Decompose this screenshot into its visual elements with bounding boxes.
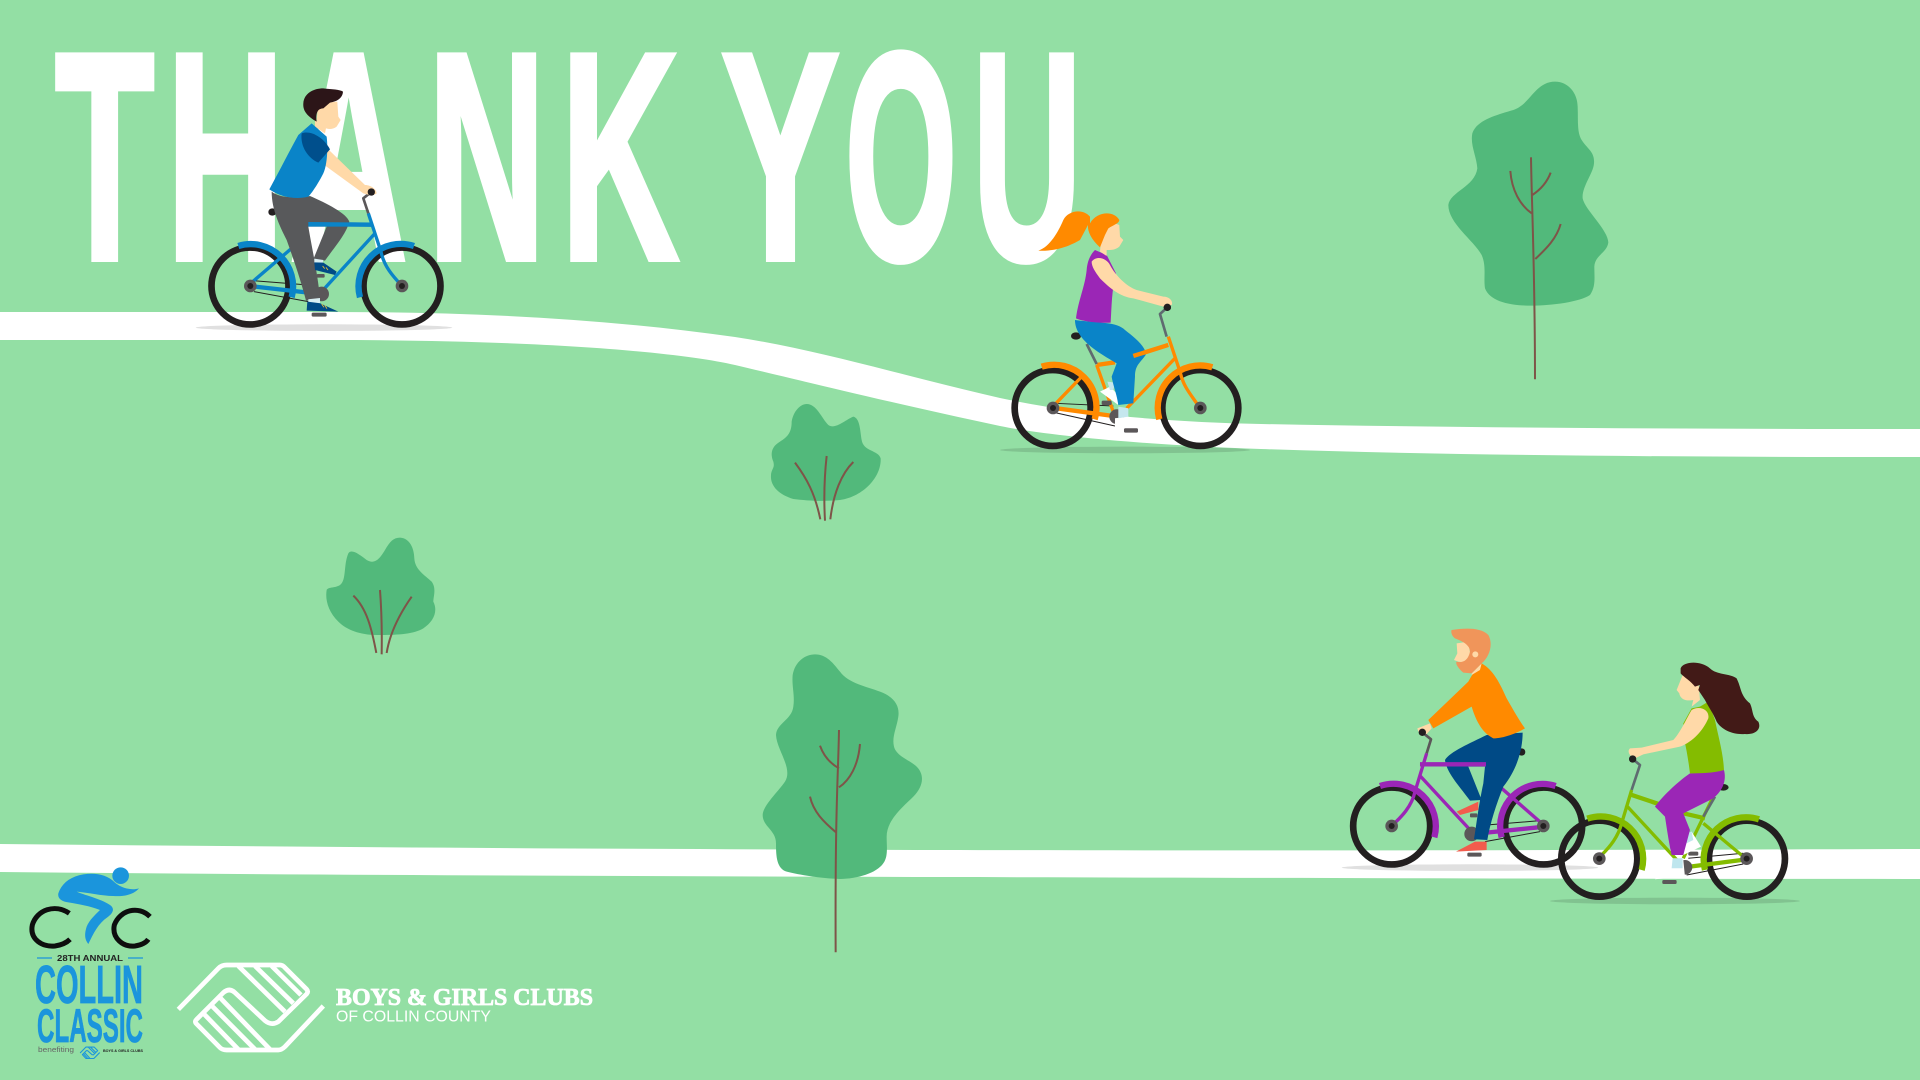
title: THANK YOU — [55, 0, 1082, 323]
text: of Collin County: OF COLLIN COUNTY — [336, 1008, 491, 1026]
cyclist: bearded man on purple bike — [1342, 629, 1598, 871]
cyclist: man on blue bike — [196, 88, 452, 331]
text: Collin: COLLIN — [35, 955, 143, 1015]
upper road — [0, 312, 1920, 457]
bush: centre — [771, 404, 881, 521]
logo: Boys and Girls Clubs — [178, 965, 593, 1050]
tree: upper right — [1448, 82, 1608, 379]
text: 28th annual — [37, 954, 143, 963]
title: THANK YOU: N — [428, 0, 545, 322]
title: THANK YOU: Y — [721, 0, 840, 322]
title: THANK YOU: U — [973, 0, 1082, 322]
cyclist: woman on orange bike — [1000, 211, 1250, 453]
title: THANK YOU: T — [55, 0, 154, 322]
tree: lower centre — [763, 654, 922, 952]
bush: left — [326, 538, 435, 654]
title: THANK YOU: A — [290, 0, 407, 322]
text: benefiting: benefiting — [38, 1045, 74, 1054]
lower road — [0, 844, 1920, 879]
text: small Boys and Girls Clubs: BOYS & GIRLS CLUBS — [103, 1048, 143, 1053]
cyclist: woman on green bike — [1550, 663, 1800, 904]
icon: small handshake — [80, 1047, 100, 1058]
icon: handshake — [178, 965, 323, 1050]
text: Classic: CLASSIC — [37, 999, 143, 1052]
text: 28th annual: 28TH ANNUAL — [57, 954, 123, 963]
title: THANK YOU: H — [167, 0, 284, 322]
title: THANK YOU: O — [845, 0, 957, 323]
icon: cyclist emblem — [32, 867, 150, 946]
logo: Collin Classic — [32, 867, 150, 1058]
text: Boys and Girls Clubs: BOYS & GIRLS CLUBS — [336, 985, 593, 1011]
title: THANK YOU: K — [561, 0, 679, 322]
